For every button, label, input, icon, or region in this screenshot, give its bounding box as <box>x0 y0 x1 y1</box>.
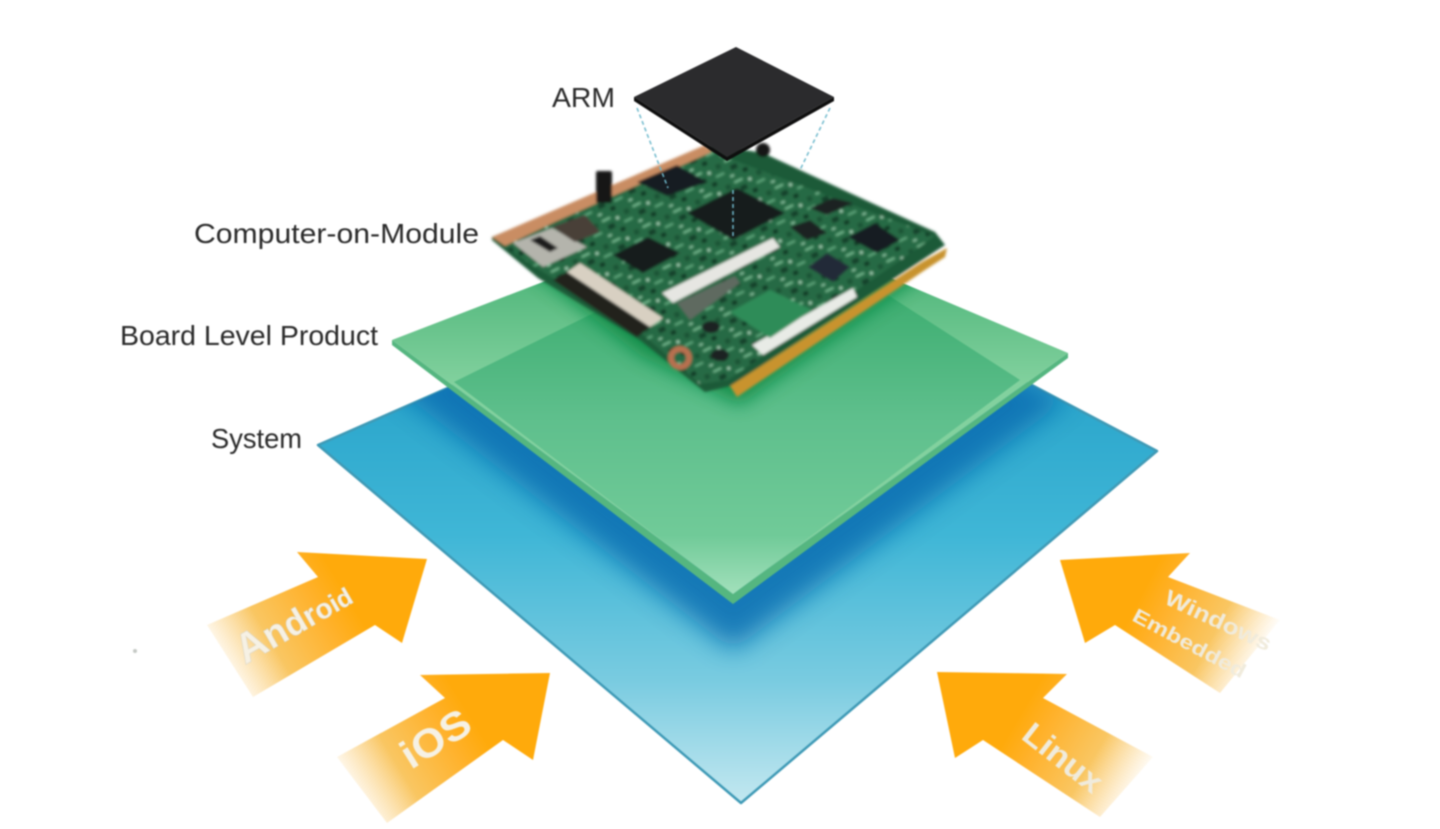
green module area <box>730 290 812 338</box>
arrow: Android: Android <box>226 569 359 673</box>
board level layer: green plate <box>391 278 1069 604</box>
copper top edge <box>492 145 712 246</box>
flat cable connector <box>553 272 650 337</box>
right memory chip <box>848 223 900 253</box>
white label 1 <box>662 238 780 303</box>
label: ARM: ARM <box>552 82 615 113</box>
left memory chip <box>613 237 680 273</box>
computer-on-module circuit board <box>492 143 947 397</box>
SD card slot <box>513 228 587 267</box>
copper torus <box>671 349 689 367</box>
top-left memory chip <box>637 165 707 196</box>
system layer: blue plate <box>316 382 1160 806</box>
arrow: Linux <box>937 672 1153 817</box>
dark QFN chip <box>808 253 850 282</box>
stray speck <box>133 649 137 653</box>
arrow: Linux: Linux <box>1016 715 1111 800</box>
arrow: iOS: iOS <box>392 701 479 778</box>
label: System: System <box>211 423 302 454</box>
arrow: Windows Embedded: Windows <box>1161 585 1276 656</box>
small chips <box>702 198 853 361</box>
black part by chip <box>756 143 770 157</box>
central processor <box>687 188 785 240</box>
gold edge connector <box>730 248 947 397</box>
grey connector under label <box>677 276 740 320</box>
label: Board Level Product: Board Level Product <box>120 320 378 351</box>
black post <box>596 171 612 203</box>
arrow: Android <box>207 552 427 697</box>
arrow: Windows Embedded <box>1060 553 1280 693</box>
white label 2 <box>752 288 857 355</box>
ARM chip with dashed guides <box>634 47 834 238</box>
arrow: iOS <box>337 673 550 823</box>
label: Computer-on-Module: Computer-on-Module <box>194 218 479 249</box>
arrow: Windows Embedded: Embedded <box>1129 605 1249 683</box>
